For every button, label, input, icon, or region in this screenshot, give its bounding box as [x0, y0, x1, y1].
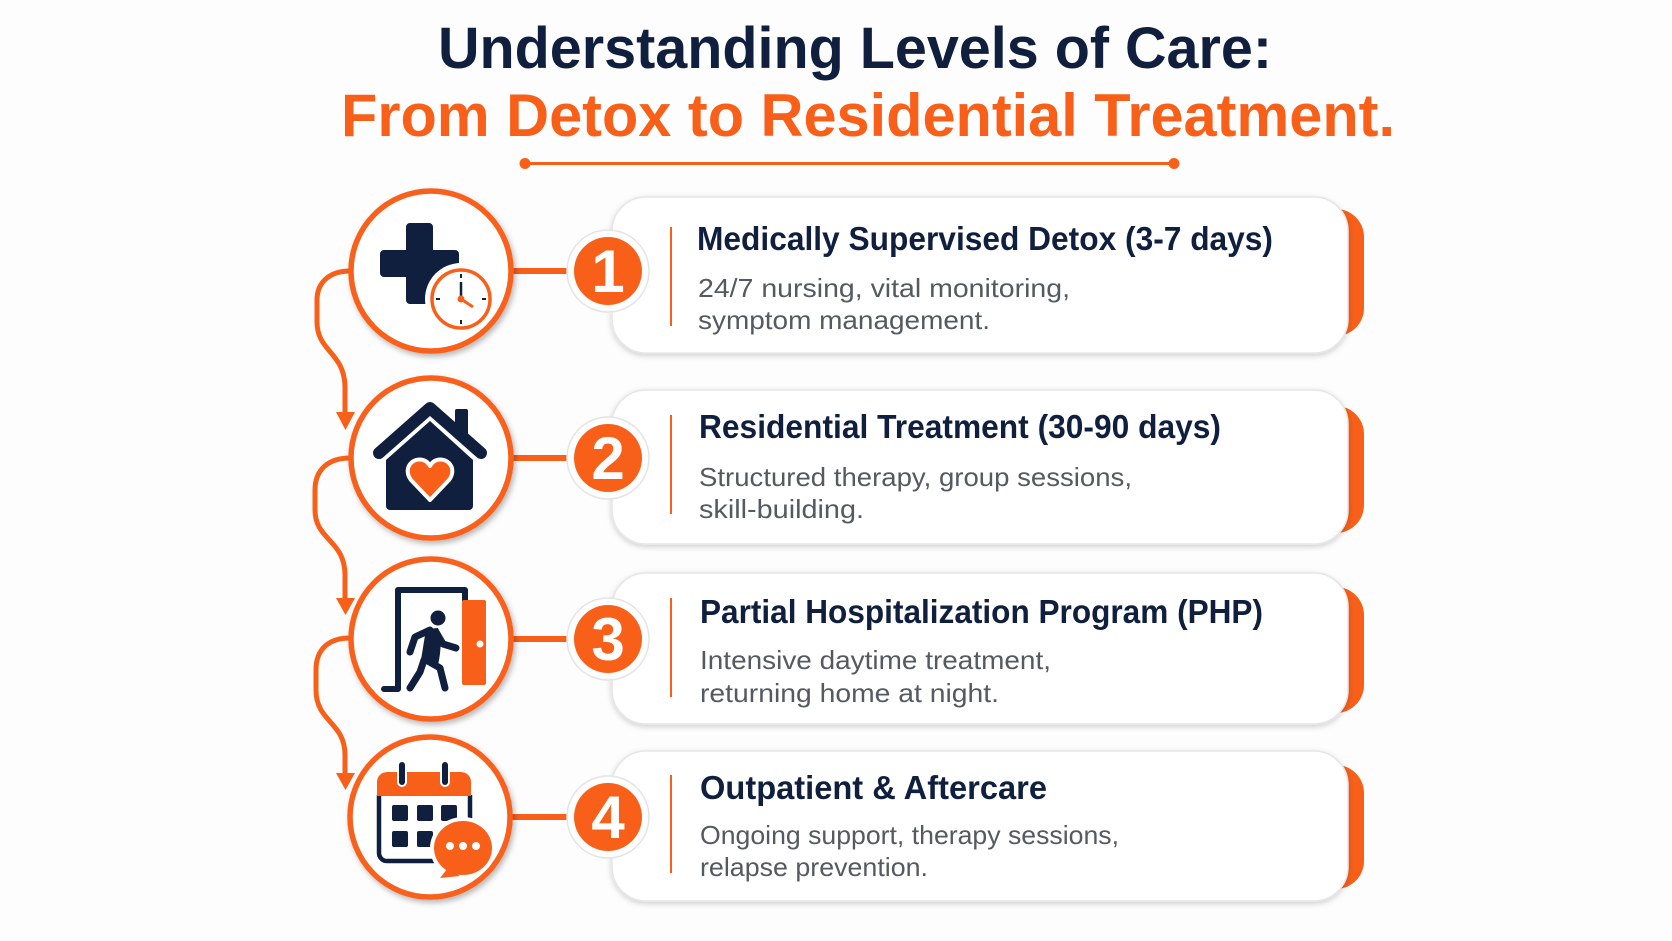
card 3 side tab	[1305, 587, 1364, 713]
card 2 description: skill-building.	[699, 494, 864, 524]
connector and badge 3: 3	[591, 606, 625, 673]
icon: medical cross with clock	[351, 191, 511, 351]
icon: house with heart	[351, 378, 511, 538]
card 2 description	[699, 462, 1132, 524]
panel: step 1 card	[612, 197, 1364, 353]
card 2 heading: Residential Treatment (30-90 days)	[699, 408, 1221, 445]
panel: step 2 card	[612, 390, 1364, 544]
connector and badge 4: 4	[591, 784, 625, 851]
card 3 heading: Partial Hospitalization Program (PHP)	[700, 593, 1263, 630]
card 4 description: relapse prevention.	[700, 852, 928, 882]
card 3 description	[700, 645, 1051, 708]
title: From Detox to Residential Treatment.	[341, 82, 1395, 149]
connector and badge 2	[510, 417, 649, 499]
connector and badge 2: 2	[591, 425, 625, 492]
arrow: step 2 to 3	[315, 458, 355, 615]
connector and badge 4	[510, 776, 649, 858]
card 3 description: returning home at night.	[700, 678, 999, 708]
card 4 description	[700, 820, 1119, 882]
arrow: step 1 to 2	[317, 271, 355, 430]
icon: person walking through door	[351, 559, 511, 719]
card 3 description: Intensive daytime treatment,	[700, 645, 1051, 675]
title divider	[520, 158, 1180, 169]
card 1 description: 24/7 nursing, vital monitoring,	[698, 273, 1070, 303]
card 4 side tab	[1305, 765, 1364, 889]
card 4 heading: Outpatient & Aftercare	[700, 769, 1047, 806]
card 1 side tab	[1305, 209, 1364, 336]
icon: calendar with speech bubble	[350, 737, 510, 897]
connector and badge 3	[510, 598, 649, 680]
card 1 description: symptom management.	[698, 305, 990, 335]
card 1 description	[698, 273, 1070, 335]
card 2 side tab	[1305, 406, 1364, 533]
card 4 description: Ongoing support, therapy sessions,	[700, 820, 1119, 850]
arrow: step 3 to 4	[316, 638, 355, 790]
title: Understanding Levels of Care:	[438, 16, 1272, 81]
panel: step 3 card	[612, 573, 1364, 724]
panel: step 4 card	[612, 751, 1364, 901]
connector and badge 1: 1	[591, 238, 625, 305]
connector and badge 1	[510, 230, 649, 312]
card 1 heading: Medically Supervised Detox (3-7 days)	[697, 220, 1273, 257]
card 2 description: Structured therapy, group sessions,	[699, 462, 1132, 492]
title	[341, 16, 1395, 149]
